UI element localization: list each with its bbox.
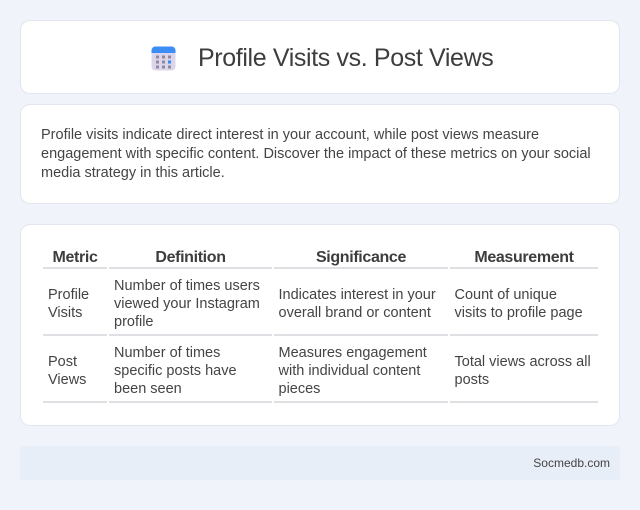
footer bar xyxy=(20,446,620,480)
title: Profile Visits vs. Post Views xyxy=(198,44,493,72)
row 1: Metric: Visits xyxy=(48,305,82,321)
row 1: Definition: profile xyxy=(114,314,154,330)
row 1: Metric xyxy=(48,287,89,321)
table header: Significance: Significance xyxy=(316,249,406,266)
table header: Metric: Metric xyxy=(52,249,98,266)
row 2: Measurement: Total views across all xyxy=(454,354,591,370)
row 1: Measurement: Count of unique xyxy=(454,287,557,303)
text block: introduction: engagement with specific content. Discover the impact of these metrics on your social xyxy=(41,146,591,162)
row 2: Significance xyxy=(278,345,427,397)
icon: calendar xyxy=(152,46,176,70)
row 2: Measurement: posts xyxy=(454,372,489,388)
row 2: Significance: with individual content xyxy=(278,363,420,379)
panel: comparison table xyxy=(20,224,620,426)
table header: Definition: Definition xyxy=(155,249,226,266)
row 1: Definition: viewed your Instagram xyxy=(114,296,260,312)
row 2: Metric xyxy=(48,354,86,388)
footer text: source: Socmedb.com xyxy=(533,456,610,470)
row 1: Significance: Indicates interest in your xyxy=(278,287,436,303)
row 2: Definition: been seen xyxy=(114,381,182,397)
row 2: Significance: Measures engagement xyxy=(278,345,427,361)
row 1: Definition xyxy=(114,278,260,330)
text block: introduction: media strategy in this article. xyxy=(41,165,225,181)
row 1: Measurement xyxy=(454,287,583,321)
row 2: Definition: Number of times xyxy=(114,345,220,361)
row 1: Measurement: visits to profile page xyxy=(454,305,583,321)
table header: Measurement: Measurement xyxy=(474,249,574,266)
row 2: Metric: Views xyxy=(48,372,86,388)
row 2: Metric: Post xyxy=(48,354,77,370)
row 2: Measurement xyxy=(454,354,591,388)
row 1: Metric: Profile xyxy=(48,287,89,303)
row 2: Definition: specific posts have xyxy=(114,363,237,379)
text block: introduction xyxy=(41,127,591,181)
row 1: Significance xyxy=(278,287,436,321)
panel: introduction xyxy=(20,104,620,204)
row 1: Definition: Number of times users xyxy=(114,278,260,294)
row 1: Significance: overall brand or content xyxy=(278,305,431,321)
panel: header xyxy=(20,20,620,94)
row 2: Significance: pieces xyxy=(278,381,320,397)
text block: introduction: Profile visits indicate direct interest in your account, while post views measure xyxy=(41,127,539,143)
row 2: Definition xyxy=(114,345,237,397)
